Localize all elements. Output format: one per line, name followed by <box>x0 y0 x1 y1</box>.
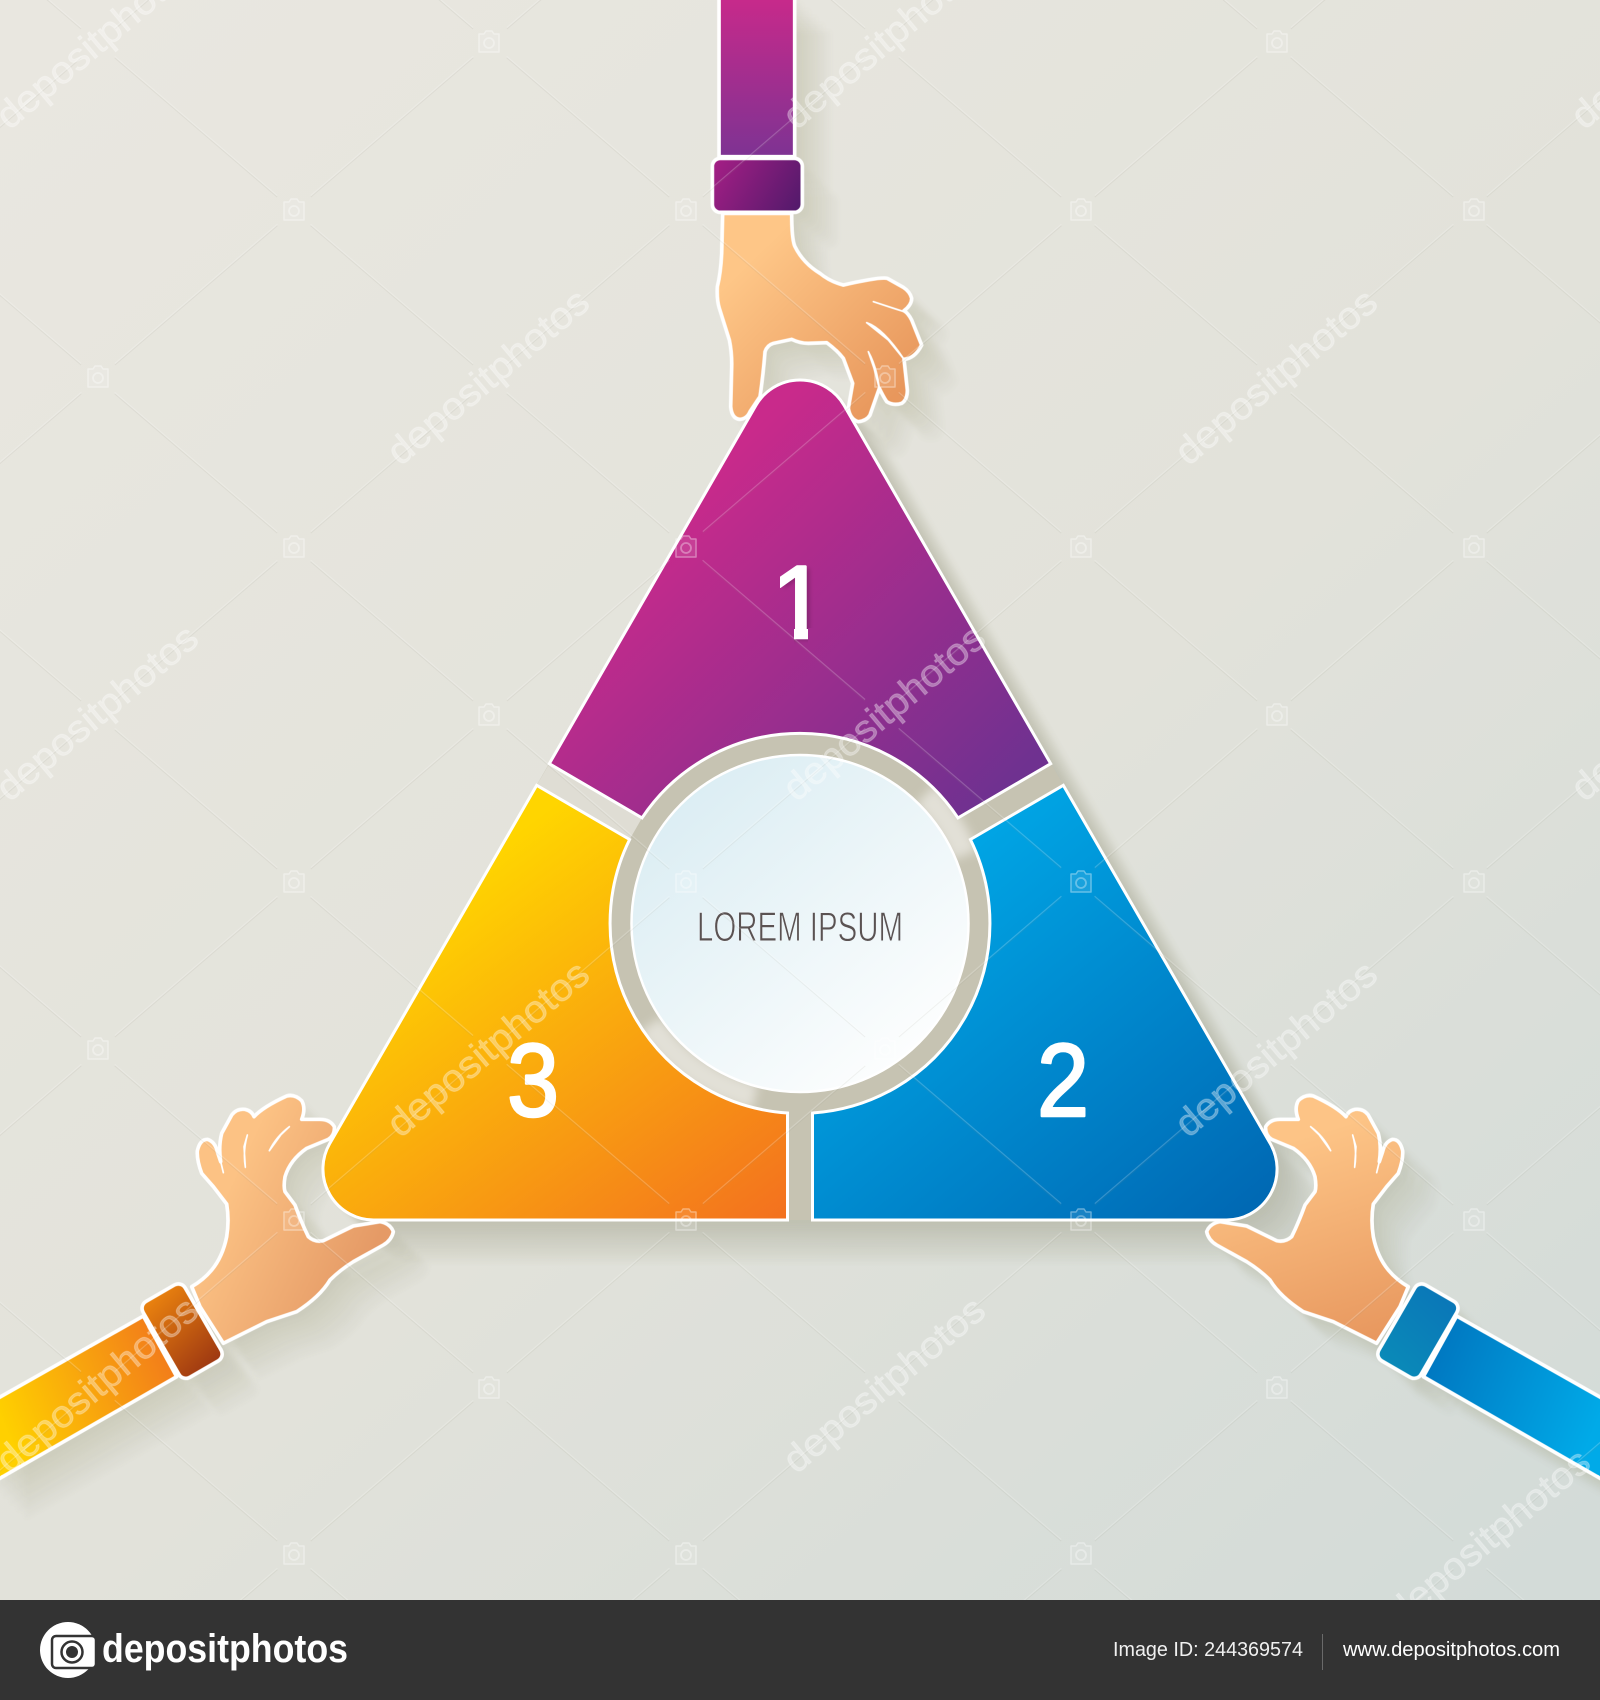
segment 2 <box>812 785 1277 1220</box>
number 1: 1 <box>774 547 832 663</box>
segment 1 <box>549 380 1051 818</box>
hand 1: top arm holding the apex <box>712 0 922 422</box>
watermark text: depositphotos <box>379 953 598 1146</box>
hand 3 cuff <box>139 1281 225 1381</box>
number 2: 2 <box>1037 1021 1089 1138</box>
footer logo icon <box>40 1622 96 1678</box>
hand 3 palm and fingers <box>192 1096 393 1343</box>
hand 1 palm and fingers <box>717 213 922 422</box>
triangle diagram <box>323 380 1277 1220</box>
watermark text: depositphotos <box>775 617 994 810</box>
watermark text: depositphotos <box>1380 1441 1599 1634</box>
segment 3 <box>323 785 788 1220</box>
recessed ring and gaps <box>323 380 1277 1220</box>
watermark text: depositphotos <box>1167 953 1386 1146</box>
hand 2 sleeve <box>1423 1316 1600 1484</box>
watermark text: depositphotos <box>379 281 598 474</box>
website: www.depositphotos.com <box>1342 1639 1560 1661</box>
footer brand name: depositphotos <box>102 1627 348 1671</box>
watermark camera icons <box>88 31 1484 1564</box>
centre disc <box>632 755 968 1092</box>
footer bar <box>0 1600 1600 1700</box>
number 1: 1 <box>770 545 828 661</box>
number 3: 3 <box>507 1021 559 1138</box>
hand 2 palm and fingers <box>1207 1096 1408 1343</box>
centre label: LOREM IPSUM <box>697 903 903 950</box>
image id: Image ID: 244369574 <box>1113 1639 1303 1661</box>
watermark text: depositphotos <box>775 1289 994 1482</box>
hand 2 cuff <box>1375 1281 1461 1381</box>
number 3: 3 <box>511 1025 563 1142</box>
hand 1 sleeve <box>719 0 795 157</box>
hand 3 sleeve <box>0 1316 177 1484</box>
hand 3: lower-left arm <box>0 1096 393 1484</box>
watermark text: depositphotos <box>1167 281 1386 474</box>
hand 2: lower-right arm <box>1207 1096 1600 1484</box>
number 1 <box>780 565 811 642</box>
hand 1 cuff <box>712 158 802 212</box>
number 2: 2 <box>1041 1025 1093 1142</box>
